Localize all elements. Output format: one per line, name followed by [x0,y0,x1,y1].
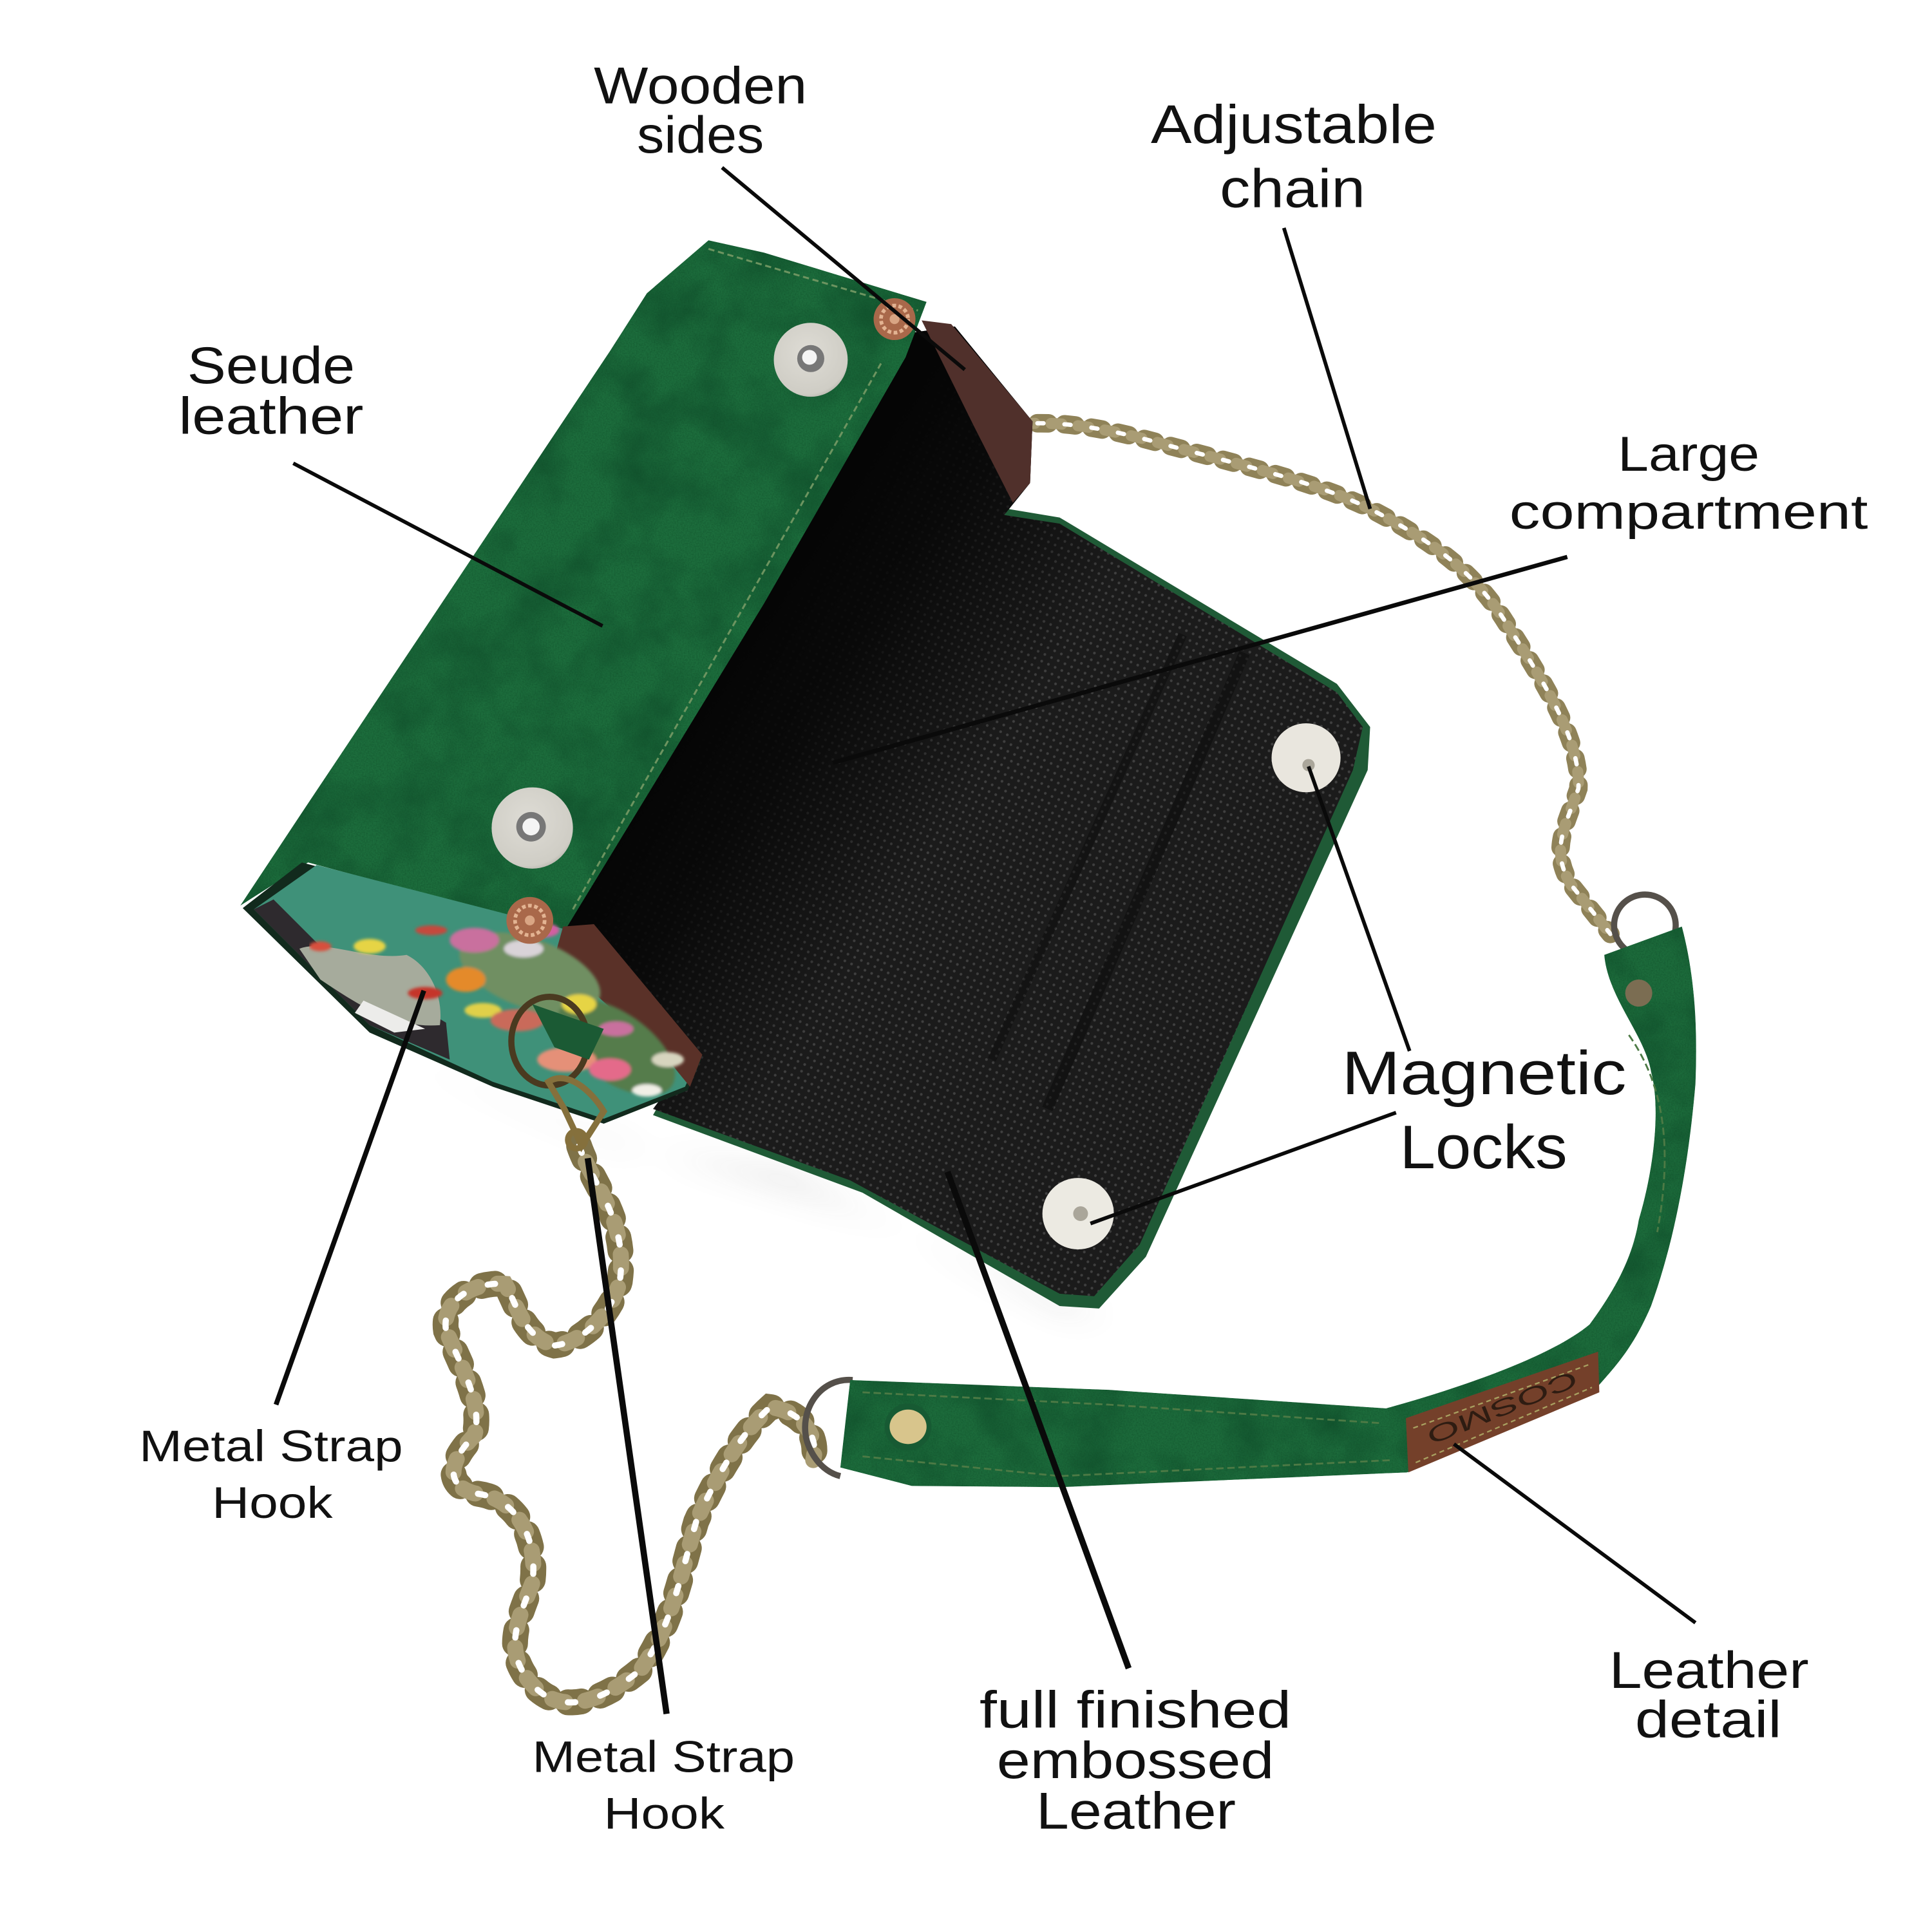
stitching [308,249,918,927]
label: full finished embossed leather: full finished [980,1681,1291,1739]
label: suede leather: leather [178,387,363,445]
label: suede leather: Seude [187,337,355,395]
rivet bottom [506,897,553,944]
pointer: leather detail [1454,1444,1696,1623]
label: full finished embossed leather: embossed [997,1732,1274,1790]
pointer: magnetic lock upper [1309,766,1410,1051]
label: metal strap hook left [139,1421,403,1528]
rivet top [874,298,916,340]
leather patch: COSMO [1423,1365,1582,1450]
bottom chain [446,1146,815,1702]
interior and flap lining [564,327,1363,1296]
label: large compartment [1510,427,1868,540]
label: large compartment: Large [1618,427,1759,482]
label: magnetic locks: Locks [1399,1113,1567,1182]
label: metal strap hook bottom [533,1732,795,1838]
label: full finished embossed leather: Leather [1036,1782,1236,1840]
magnetic lock top [774,323,848,397]
strap snap upper [1625,980,1653,1007]
label: wooden sides [594,57,807,164]
label: wooden sides: Wooden [594,57,807,115]
magnetic lock flap upper [1271,723,1341,792]
floral decoration [309,916,692,1115]
label: metal strap hook left: Hook [212,1478,333,1528]
painted side panel [243,862,703,1124]
label: metal strap hook left: Metal Strap [139,1421,403,1471]
pointer: embossed leather [947,1172,1129,1669]
label: large compartment: compartment [1510,485,1868,540]
flap green edge [653,505,1370,1309]
label: suede leather [178,337,363,445]
leather patch [1406,1352,1599,1472]
pointer: wooden sides [722,167,965,370]
bag shadow [394,1059,1109,1318]
label: magnetic locks: Magnetic [1342,1039,1627,1108]
pointer: large compartment [833,557,1567,762]
suede panel [240,240,927,931]
top chain [1010,423,1611,934]
pointer: suede leather [293,463,603,626]
pointer: metal strap hook left [276,990,424,1405]
label: adjustable chain: chain [1220,158,1365,218]
label: leather detail [1609,1642,1809,1749]
leather strap [840,927,1696,1487]
bag ring and tab [511,997,604,1086]
label: leather detail: detail [1635,1691,1782,1749]
label: metal strap hook bottom: Metal Strap [533,1732,795,1781]
magnetic lock flap lower [1043,1178,1114,1249]
swivel hook [548,1078,604,1148]
label: wooden sides: sides [637,106,764,164]
magnetic lock left [491,788,573,869]
wooden side top [922,320,1032,503]
pointer: adjustable chain [1284,228,1370,509]
label: magnetic locks [1342,1039,1627,1182]
strap snap lower [885,1403,931,1450]
label: metal strap hook bottom: Hook [603,1788,725,1838]
label: leather detail: Leather [1609,1642,1809,1700]
pointer: metal strap hook bottom [588,1158,667,1714]
label: adjustable chain [1151,94,1437,218]
pointer: magnetic lock lower [1090,1113,1396,1224]
label: adjustable chain: Adjustable [1151,94,1437,155]
label: full finished embossed leather [980,1681,1291,1840]
strap rings [805,895,1676,1476]
